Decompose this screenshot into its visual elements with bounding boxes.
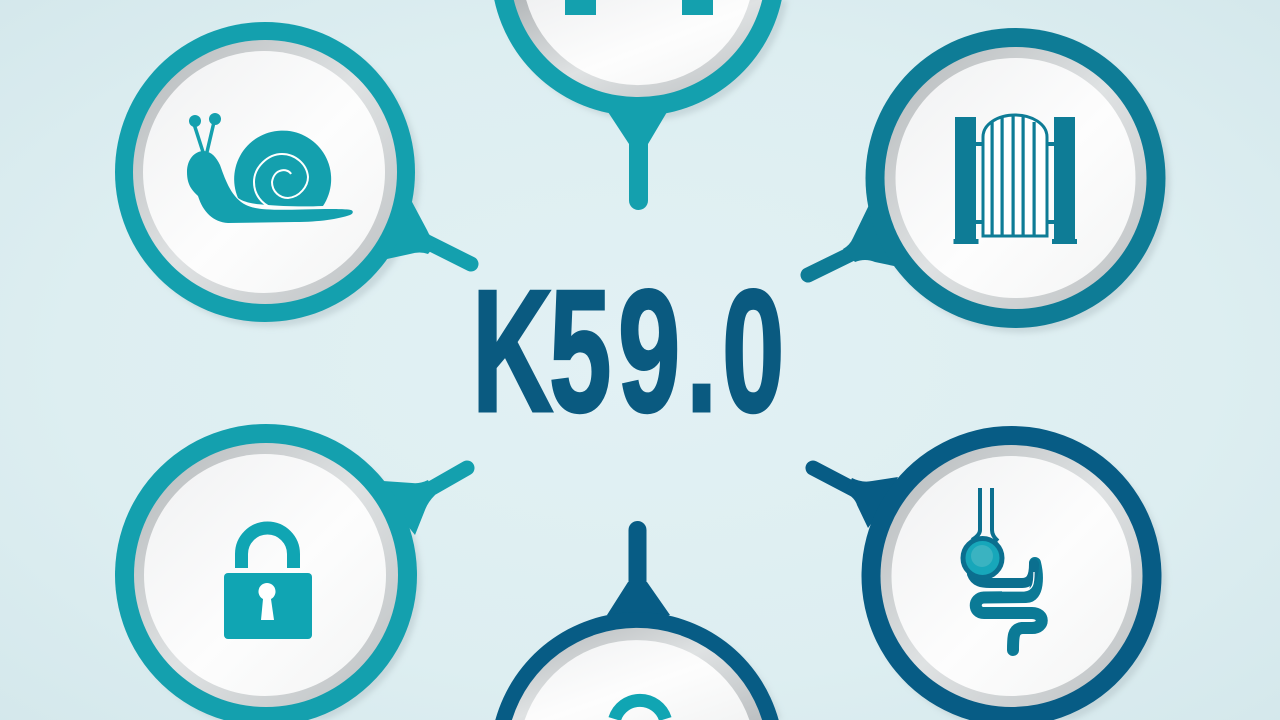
- ring: digestive: [862, 426, 1162, 720]
- icon: bottom lock shackle: [615, 700, 665, 719]
- panel: bottom lock: [495, 530, 782, 720]
- panel: digestive tract: [813, 426, 1166, 720]
- ring: bottom: [495, 612, 779, 720]
- pointer: lock: [383, 468, 467, 535]
- ring: gate: [866, 28, 1166, 328]
- icon: digestive tract: [963, 488, 1042, 650]
- icon: gate: [954, 115, 1077, 244]
- pointer: gate: [808, 205, 900, 275]
- ring: snail: [115, 22, 415, 322]
- pointer: top: [608, 100, 667, 200]
- ring: top: [494, 0, 782, 116]
- panel: lock: [115, 424, 467, 720]
- icon: top gate posts: [565, 0, 713, 15]
- pointer: bottom: [607, 530, 670, 625]
- panel: snail: [115, 22, 471, 327]
- title: K59.0: K59.0: [472, 254, 784, 449]
- pointer: digestive: [813, 468, 898, 528]
- ring: lock: [115, 424, 417, 720]
- icon: snail: [187, 113, 353, 223]
- panel: gate: [808, 28, 1170, 333]
- panel: top gate: [494, 0, 788, 200]
- pointer: snail: [370, 200, 471, 264]
- icon: lock: [224, 528, 312, 639]
